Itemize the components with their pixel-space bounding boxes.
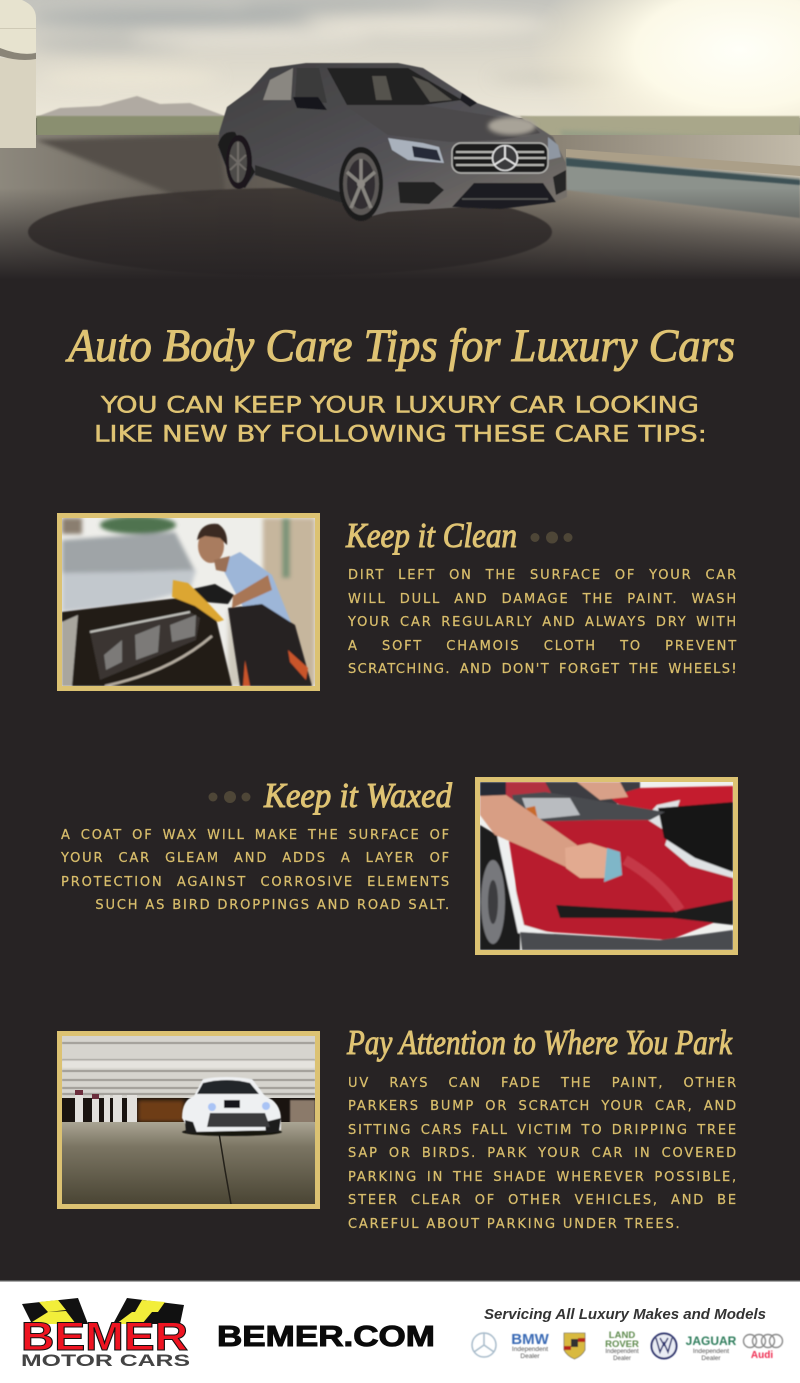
logo: BMW: Independent	[512, 1346, 548, 1353]
logo: Jaguar: Independent	[693, 1348, 729, 1355]
heading: keep it clean: Keep it Clean	[345, 516, 517, 555]
car	[218, 63, 567, 221]
text block: keep it waxed: PROTECTION AGAINST CORROSIVE ELEMENTS	[61, 874, 451, 890]
text block: keep it clean: DIRT LEFT ON THE SURFACE OF YOUR CAR	[348, 568, 738, 583]
servicing line: Servicing All Luxury Makes and Models	[484, 1306, 766, 1323]
logo: Land Rover: ROVER	[605, 1339, 639, 1350]
logo: Bemer Motor Cars: MOTOR CARS	[21, 1351, 190, 1370]
subtitle	[94, 392, 707, 448]
logo: BMW: Dealer	[520, 1353, 540, 1360]
text block: where you park: PARKERS BUMP OR SCRATCH YOUR CAR, AND	[348, 1099, 738, 1114]
text block: where you park: SITTING CARS FALL VICTIM TO DRIPPING TREE	[348, 1122, 738, 1138]
logo: Bemer Motor Cars	[21, 1298, 190, 1370]
text block: keep it clean: YOUR CAR REGULARLY AND ALWAYS DRY WITH	[348, 615, 738, 630]
logo: Land Rover: Independent	[605, 1349, 639, 1355]
logo: Land Rover: LAND	[609, 1330, 635, 1341]
logo: Jaguar: Dealer	[701, 1355, 721, 1362]
text block: keep it clean: A SOFT CHAMOIS CLOTH TO PREVENT	[348, 638, 738, 654]
text block: keep it waxed	[60, 828, 451, 913]
hero photo: car on terrace	[0, 0, 800, 274]
logo: Jaguar: JAGUAR	[686, 1334, 737, 1348]
logo: Land Rover: Dealer	[613, 1356, 631, 1362]
logo: Bemer Motor Cars: BEMER	[21, 1315, 188, 1359]
logo: Porsche	[564, 1333, 585, 1359]
text block: keep it clean: SCRATCHING. AND DON'T FORGET THE WHEELS!	[348, 662, 738, 677]
title: Auto Body Care Tips for Luxury Cars	[65, 320, 735, 372]
logo: Land Rover	[605, 1330, 639, 1362]
logo: Mercedes	[472, 1333, 496, 1357]
photo: man polishing black car	[57, 513, 320, 691]
heading: where you park: Pay Attention to Where You Park	[346, 1023, 733, 1062]
heading: keep it waxed: Keep it Waxed	[263, 776, 452, 815]
text block: where you park: PARKING IN THE SHADE WHEREVER POSSIBLE,	[348, 1170, 738, 1184]
photo: hand waxing red car	[475, 777, 738, 955]
logo: BMW: BMW	[511, 1331, 550, 1348]
dots: keep it waxed	[208, 791, 250, 803]
text block: where you park	[348, 1076, 738, 1232]
text block: keep it waxed: SUCH AS BIRD DROPPINGS AND ROAD SALT.	[95, 898, 451, 913]
website: BEMER.COM	[217, 1321, 435, 1353]
text block: keep it clean	[348, 568, 738, 677]
photo: white car in parking garage	[57, 1031, 320, 1209]
text block: where you park: CAREFUL ABOUT PARKING UNDER TREES.	[348, 1216, 682, 1232]
text block: keep it waxed: YOUR CAR GLEAM AND ADDS A LAYER OF	[61, 851, 451, 866]
text block: where you park: SAP OR BIRDS. PARK YOUR CAR IN COVERED	[348, 1146, 738, 1161]
logo: Jaguar	[686, 1334, 737, 1362]
logo: Audi	[744, 1334, 782, 1361]
brand logos	[472, 1330, 782, 1362]
dots: keep it clean	[530, 532, 572, 544]
text block: keep it clean: WILL DULL AND DAMAGE THE PAINT. WASH	[348, 592, 738, 606]
footer band	[0, 1280, 800, 1383]
text block: where you park: UV RAYS CAN FADE THE PAINT, OTHER	[348, 1076, 738, 1090]
main text and section headings	[65, 320, 735, 1062]
logo: Audi: Audi	[751, 1350, 773, 1361]
text block: keep it waxed: A COAT OF WAX WILL MAKE THE SURFACE OF	[61, 828, 451, 842]
subtitle: LIKE NEW BY FOLLOWING THESE CARE TIPS:	[94, 422, 707, 448]
logo: BMW	[511, 1331, 550, 1360]
subtitle: YOU CAN KEEP YOUR LUXURY CAR LOOKING	[100, 392, 699, 418]
logo: Volkswagen	[652, 1334, 676, 1358]
text block: where you park: STEER CLEAR OF OTHER VEHICLES, AND BE	[348, 1193, 738, 1208]
